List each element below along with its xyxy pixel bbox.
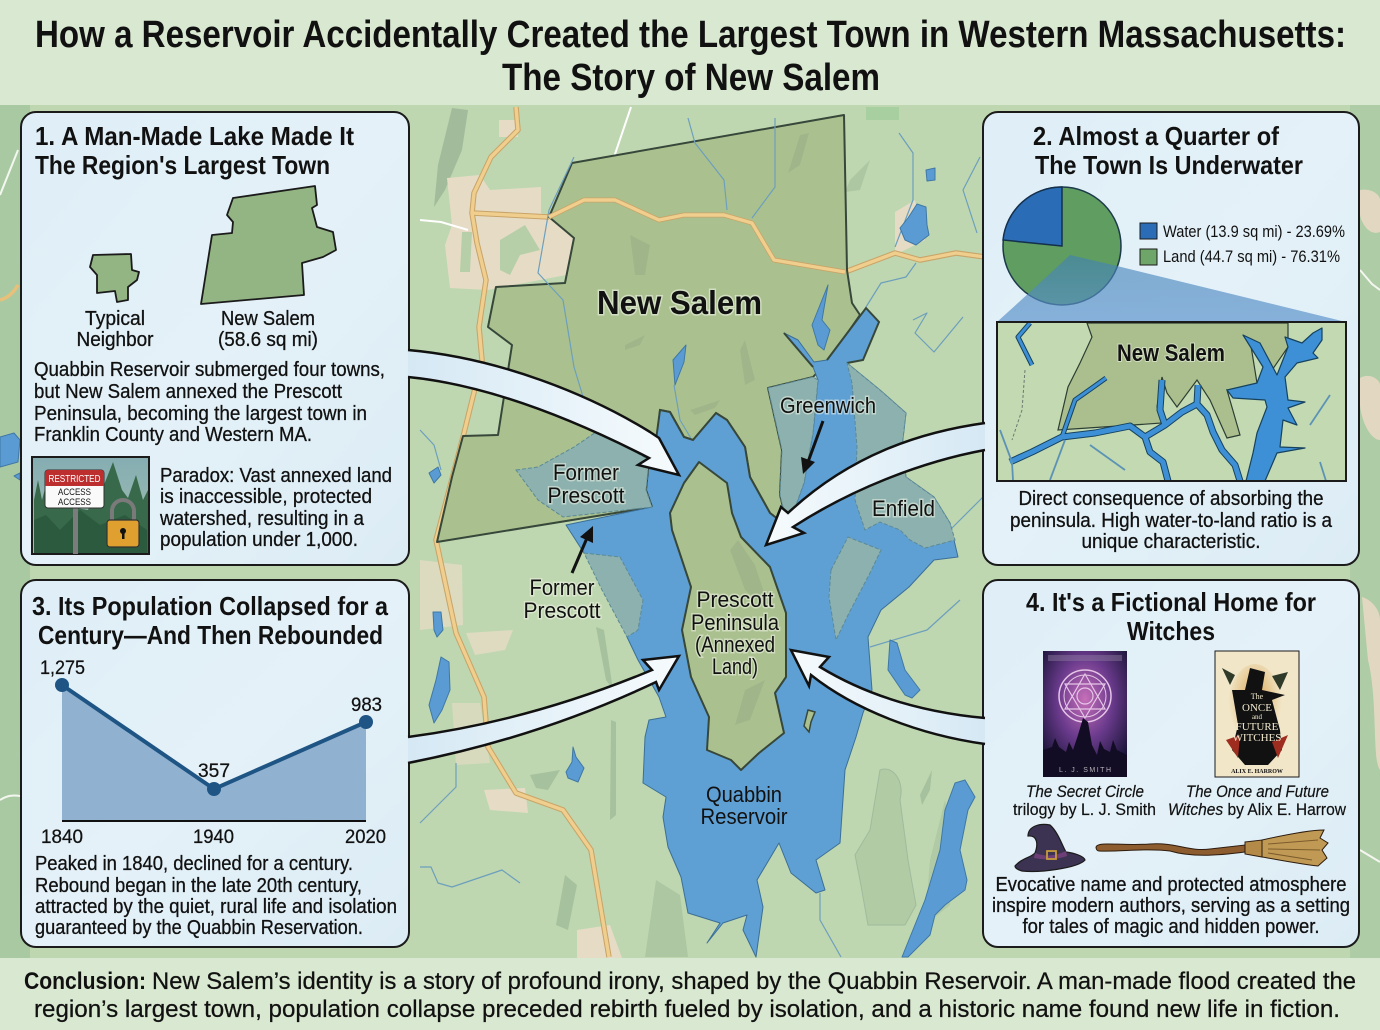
text: reservoir explanation: but New Salem annexed the Prescott [34,381,342,403]
legend [1140,222,1345,266]
label: Enfield: Enfield [872,496,935,521]
conclusion: region’s largest town, population collapse preceded rebirth fueled by isolation, and a historic name found new life in fiction. [34,996,1340,1023]
arrow: panel 2 to peninsula [766,423,985,545]
inset map: New Salem [1117,340,1225,367]
area chart [40,658,386,848]
heading 1: 1. A Man-Made Lake Made It [35,121,354,151]
arrow: panel 4 to peninsula [791,650,985,744]
label: Quabbin Reservoir: Quabbin [706,782,782,807]
conclusion: Conclusion: [24,968,146,995]
panel: 1 lake [21,112,409,565]
heading 3: 3. Its Population Collapsed for a [32,591,388,621]
label: Former Prescott below line [524,575,600,623]
text: evocative name: Evocative name and protected atmosphere [996,874,1346,896]
caption: The Once and Future Witches [1168,782,1347,819]
map: dark shoreline [646,308,879,527]
book: The Once and Future Witches [1215,651,1299,777]
label: Prescott Peninsula: Land) [712,654,758,679]
area chart: 1940 [193,827,234,848]
text: reservoir explanation: Peninsula, becoming the largest town in [34,403,367,425]
area chart: 1,275 [40,658,85,679]
arrow: panel 3 to peninsula [408,656,679,763]
heading 1 [35,121,354,180]
text: direct consequence: peninsula. High water-to-land ratio is a [1010,510,1333,532]
label: Former Prescott below line: Former [530,575,594,600]
text: reservoir explanation [34,359,385,446]
book: The Once and Future Witches: and [1252,713,1263,721]
heading 3: Century—And Then Rebounded [38,620,383,650]
label: Former Prescott on lake: Former [553,460,619,485]
heading 3 [32,591,388,650]
label: New Salem on map: New Salem [597,284,762,321]
label: Former Prescott on lake [548,460,624,508]
text: reservoir explanation: Quabbin Reservoir submerged four towns, [34,359,385,381]
label: Greenwich: Greenwich [780,393,876,418]
label: Prescott Peninsula [691,587,780,679]
label: Typical Neighbor: Typical [85,308,145,330]
text: paradox: Paradox: Vast annexed land [160,465,392,487]
lakes [429,168,975,957]
map: small island [804,710,815,732]
label: Former Prescott on lake: Prescott [548,483,624,508]
icon: broom [1096,830,1328,866]
inset map [997,322,1346,481]
book: The Once and Future Witches: ALIX E. HARROW [1231,769,1283,775]
book: The Once and Future Witches: FUTURE [1236,721,1279,733]
label: Quabbin Reservoir [700,782,788,829]
heading 2: 2. Almost a Quarter of [1033,121,1279,151]
heading 4 [1026,587,1316,646]
label: Prescott Peninsula: Peninsula [691,610,780,635]
caption: The Secret Circle: The Secret Circle [1026,782,1144,801]
label: Prescott Peninsula: (Annexed [695,632,775,657]
area chart: 357 [198,761,230,782]
panel: 4 fiction [983,580,1359,947]
text: population story: guaranteed by the Quabbin Reservation. [35,917,363,939]
map: Prescott Peninsula [670,462,786,770]
text: direct consequence [1010,488,1333,553]
panel: 2 underwater [983,112,1359,565]
book: The Once and Future Witches: WITCHES [1233,732,1281,744]
book: The Secret Circle: L. J. SMITH [1059,767,1111,774]
text: population story: Rebound began in the late 20th century, [35,875,362,897]
text: direct consequence: Direct consequence of absorbing the [1018,488,1324,510]
caption: The Secret Circle [1013,782,1156,819]
arrow: panel 1 to peninsula [408,350,679,475]
legend: Land (44.7 sq mi) - 76.31% [1163,247,1340,266]
text: paradox [159,465,392,551]
book: The Once and Future Witches: The [1251,692,1264,701]
heading 4: 4. It's a Fictional Home for [1026,587,1316,617]
text: population story: attracted by the quiet, rural life and isolation [35,896,397,918]
conclusion [24,968,1356,1023]
text: evocative name: for tales of magic and hidden power. [1022,916,1320,938]
label: New Salem size [218,308,318,351]
icon: restricted access sign [32,457,149,554]
text: paradox: population under 1,000. [160,529,358,551]
label: New Salem size: (58.6 sq mi) [218,329,318,351]
book: The Secret Circle [1043,651,1127,777]
label: Typical Neighbor: Neighbor [76,329,154,351]
caption: The Once and Future Witches: Witches by Alix E. Harrow [1168,800,1347,819]
icon: restricted access sign: ACCESS [58,487,91,498]
area chart: 983 [351,695,382,716]
pie chart [1003,187,1121,305]
icon: roads [420,107,985,957]
icon: New Salem shape [201,186,336,304]
title: The Story of New Salem [502,57,880,99]
heading 4: Witches [1127,616,1215,646]
caption: The Secret Circle: trilogy by L. J. Smith [1013,800,1156,819]
heading 2: The Town Is Underwater [1035,150,1303,180]
label: Former Prescott below line: Prescott [524,598,600,623]
label: Prescott Peninsula: Prescott [696,587,774,612]
text: evocative name [992,874,1350,938]
text: paradox: watershed, resulting in a [159,508,365,530]
area chart: 1840 [41,827,83,848]
title [35,14,1346,99]
icon: witch hat [1015,824,1085,871]
map: New Salem town boundary [437,115,860,542]
label: Typical Neighbor [76,308,154,351]
map: flooded former towns [516,363,955,640]
text: paradox: is inaccessible, protected [160,486,372,508]
panel: 3 population [21,580,409,947]
icon: restricted access sign: ACCESS [58,497,91,508]
icon: typical neighbor shape [90,254,139,302]
text: direct consequence: unique characteristic. [1082,531,1260,553]
arrow: to Greenwich [801,421,823,474]
text: population story [35,853,397,939]
caption: The Once and Future Witches: The Once and Future [1186,782,1329,801]
map: details inside town [538,118,845,440]
text: evocative name: inspire modern authors, serving as a setting [992,895,1350,917]
legend: Water (13.9 sq mi) - 23.69% [1163,222,1345,241]
label: New Salem size: New Salem [221,308,315,330]
zoom projection [997,255,1346,322]
conclusion: New Salem’s identity is a story of profound irony, shaped by the Quabbin Reservoir. A man-made flood created the [152,968,1356,995]
heading 2 [1033,121,1303,180]
heading 1: The Region's Largest Town [35,150,330,180]
text: population story: Peaked in 1840, declined for a century. [35,853,353,875]
arrow: to Former Prescott [572,526,593,573]
area chart: 2020 [345,827,386,848]
map: Quabbin Reservoir water [566,308,958,957]
label: Quabbin Reservoir: Reservoir [700,804,788,829]
book: The Once and Future Witches: ONCE [1242,702,1272,714]
icon: restricted access sign: RESTRICTED [48,474,100,485]
text: reservoir explanation: Franklin County and Western MA. [34,424,312,446]
